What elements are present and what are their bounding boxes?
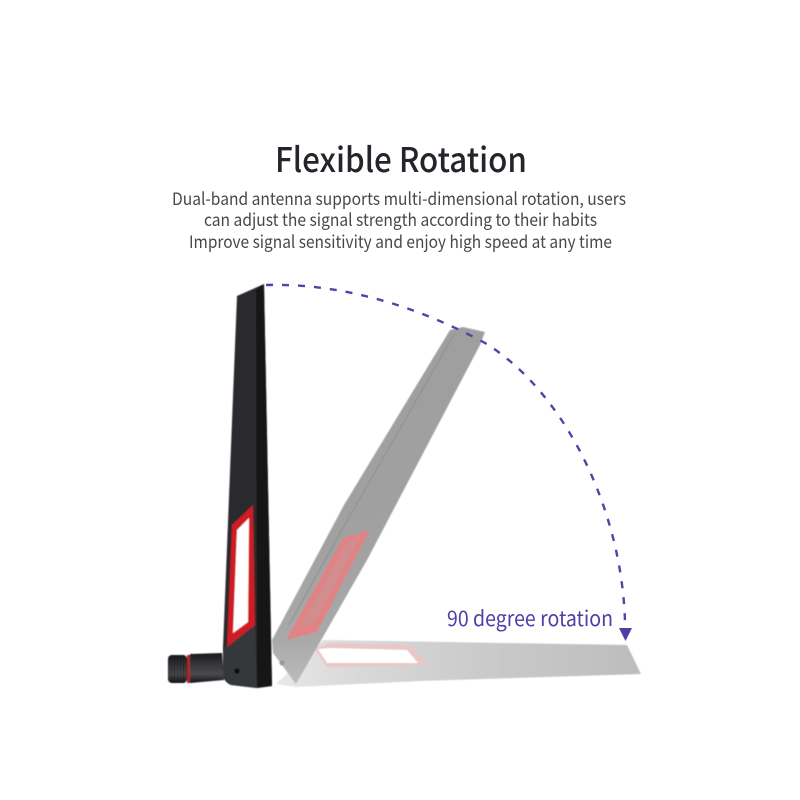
description text: can adjust the signal strength according to their habits <box>204 206 597 231</box>
antenna side face <box>256 284 272 688</box>
black antenna upright <box>168 284 272 688</box>
white window <box>233 518 249 633</box>
antenna body <box>223 284 272 688</box>
faded antenna: horizontal position <box>276 640 641 687</box>
mounting hole <box>234 668 240 674</box>
arrowhead <box>619 628 632 641</box>
title: Flexible Rotation <box>275 133 527 182</box>
faded antenna: 45 degree position <box>272 327 485 684</box>
dashed rotation arc <box>266 285 625 622</box>
lower face <box>223 625 257 688</box>
description text: Dual-band antenna supports multi-dimensional rotation, users <box>172 185 626 210</box>
description text: Improve signal sensitivity and enjoy high speed at any time <box>189 228 612 253</box>
connector <box>168 653 224 683</box>
description text <box>172 185 626 253</box>
red reflector frame <box>227 505 255 647</box>
rotation label: 90 degree rotation <box>447 603 613 633</box>
